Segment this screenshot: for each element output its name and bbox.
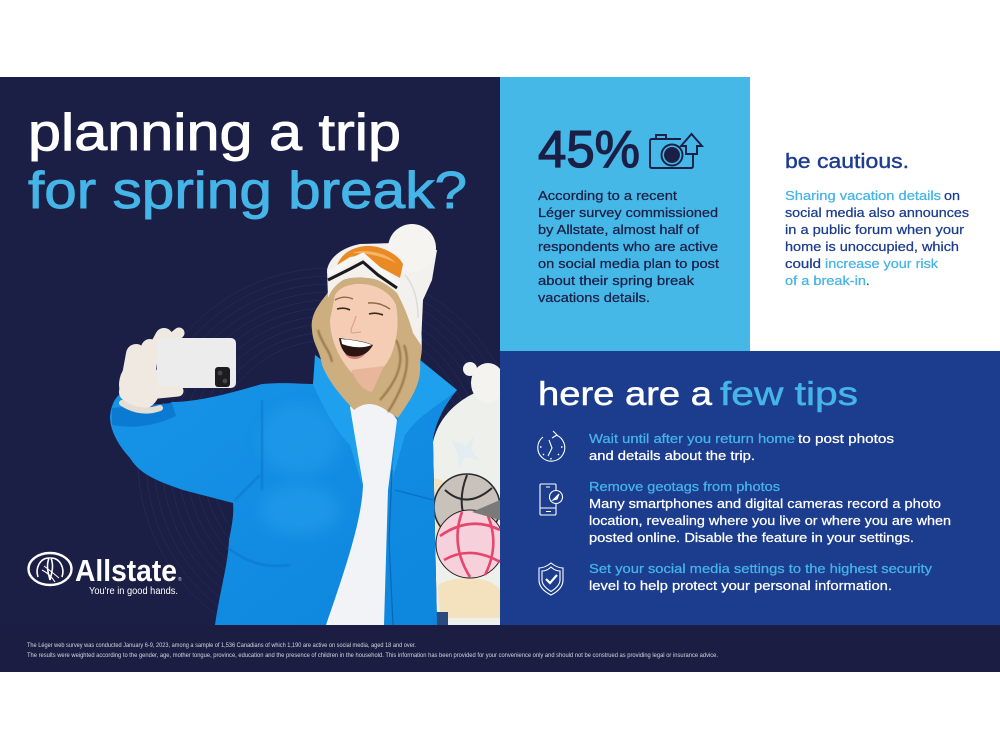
statistic description: According to a recent <box>538 188 677 203</box>
tip 1 text <box>589 431 895 463</box>
tip 2 text: Many smartphones and digital cameras record a photo <box>589 496 941 511</box>
left glove <box>119 333 179 411</box>
panel: tips <box>500 351 1000 625</box>
tip 1 text: Wait until after you return home <box>589 431 795 446</box>
statistic description: vacations details. <box>538 290 650 305</box>
footer disclaimer <box>0 625 1000 672</box>
face <box>330 284 398 392</box>
tips heading: here are a <box>538 375 713 412</box>
Allstate logo <box>28 553 182 597</box>
tips heading <box>538 375 858 412</box>
icon: camera with upload arrow <box>650 134 702 168</box>
caution text <box>785 188 970 288</box>
statistic description: on social media plan to post <box>538 256 719 271</box>
tips heading: few tips <box>720 375 858 412</box>
caution text: increase your risk <box>825 256 939 271</box>
Allstate logo: ® <box>178 576 182 583</box>
zipper edge <box>389 470 393 625</box>
icon: good hands emblem <box>28 553 72 585</box>
ski goggles <box>328 246 403 288</box>
statistic description: respondents who are active <box>538 239 718 254</box>
photo: woman taking a selfie with snowboard <box>110 224 505 625</box>
tip 1 text: to post photos <box>798 431 895 446</box>
tip 2 text <box>589 479 951 545</box>
statistic description: Léger survey commissioned <box>538 205 718 220</box>
Allstate logo: You're in good hands. <box>89 585 178 597</box>
caution text: on <box>944 188 960 203</box>
icon: clock <box>538 431 565 461</box>
background concentric arcs <box>138 268 498 615</box>
caution text: of a break-in <box>785 273 866 288</box>
hair <box>312 275 422 418</box>
tip 3 text: Set your social media settings to the highest security <box>589 561 933 576</box>
panel: left hero background <box>0 77 500 625</box>
footer disclaimer: The results were weighted according to the gender, age, mother tongue, province, education and the presence of children in the household. This information has been provided for your convenience only and should not be construed as providing legal or insurance advice. <box>27 653 718 659</box>
snowboard <box>433 394 500 625</box>
tip 3 text <box>589 561 933 593</box>
white hat with pom pom <box>327 224 437 345</box>
panel: 45% statistic <box>500 77 750 351</box>
title: for spring break? <box>28 162 467 220</box>
caution text: in a public forum when your <box>785 222 965 237</box>
caution text: social media also announces <box>785 205 970 220</box>
statistic description <box>538 188 719 305</box>
footer disclaimer: The Léger web survey was conducted January 6-9, 2023, among a sample of 1,536 Canadians of which 1,190 are active on social media, aged 18 and over. <box>27 643 416 649</box>
Allstate logo: Allstate <box>75 553 177 588</box>
icon: security shield <box>539 563 563 595</box>
white sweater <box>326 399 397 625</box>
phone <box>157 338 236 388</box>
jacket <box>110 355 457 625</box>
caution text: could <box>785 256 821 271</box>
statistic description: about their spring break <box>538 273 695 288</box>
tip 3 text: level to help protect your personal information. <box>589 578 892 593</box>
tip 1 text: and details about the trip. <box>589 448 755 463</box>
caution text: . <box>866 273 870 288</box>
icon: smartphone with compass <box>540 484 562 515</box>
caution text: Sharing vacation details <box>785 188 942 203</box>
tip 2 text: posted online. Disable the feature in your settings. <box>589 530 914 545</box>
tip 2 text: Remove geotags from photos <box>589 479 781 494</box>
title <box>28 104 467 220</box>
caution text: home is unoccupied, which <box>785 239 959 254</box>
glove thumb <box>158 391 178 393</box>
panel: be cautious <box>750 77 1000 351</box>
tip 2 text: location, revealing where you live or where you are when <box>589 513 951 528</box>
statistic description: by Allstate, almost half of <box>538 222 699 237</box>
statistic number: 45% <box>538 121 640 179</box>
right glove <box>463 362 500 394</box>
heading: be cautious. <box>785 151 909 173</box>
title: planning a trip <box>28 104 401 162</box>
